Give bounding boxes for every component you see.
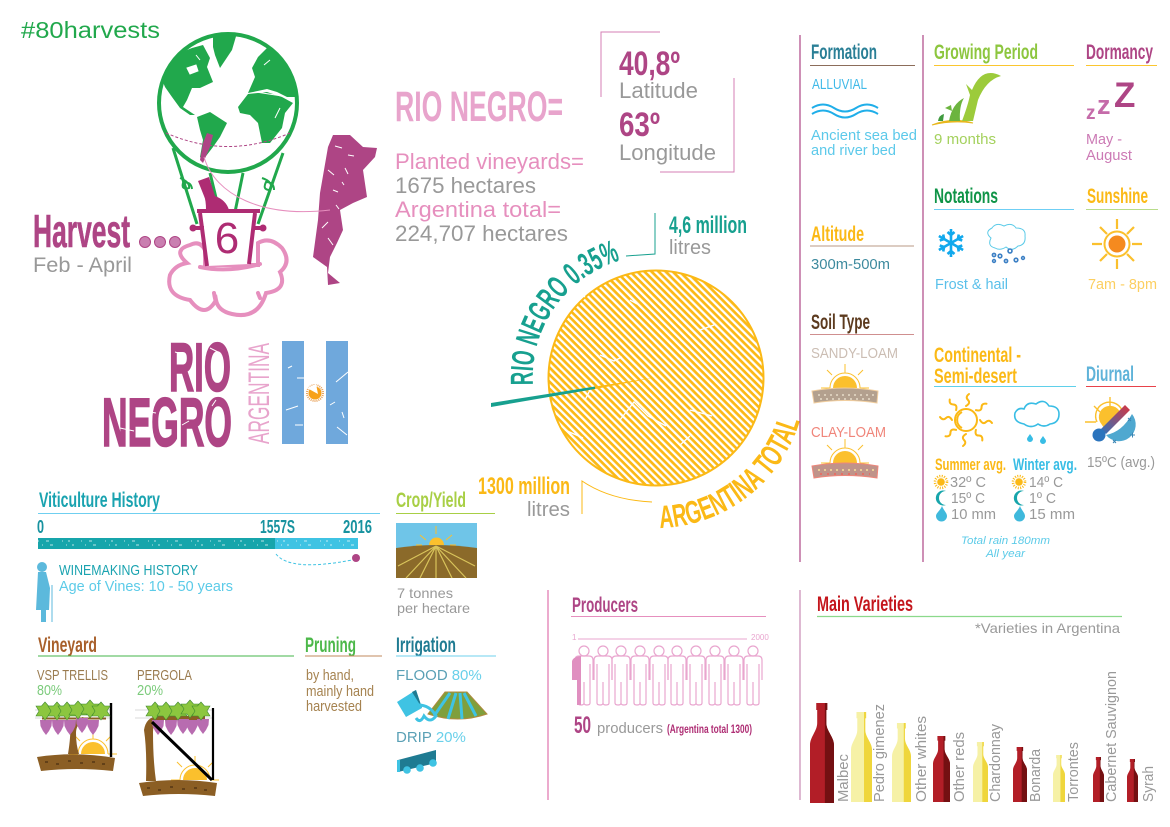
panel: soil type: SANDY-LOAM: [811, 345, 898, 362]
Pedro gimenez: Pedro gimenez: [871, 704, 888, 802]
panel: crop yield: per hectare: [397, 600, 470, 616]
icon: clay loam soil: [812, 439, 878, 478]
panel: irrigation: [396, 634, 496, 774]
panel: notations: [934, 185, 1074, 293]
chart: production circle: [478, 212, 800, 528]
panel: formation: ALLUVIAL: [812, 76, 867, 93]
panel: pruning: mainly hand: [306, 683, 374, 700]
producer count: 50: [574, 712, 591, 739]
summer averages: 32º C: [950, 474, 986, 491]
icon: elderly woman: [36, 562, 52, 622]
icon: sun: [1092, 219, 1142, 269]
icon: summer sun: [940, 394, 992, 446]
Syrah: [1127, 759, 1157, 802]
Torrontes: [1053, 742, 1082, 802]
vineyard area stats: Planted vineyards=: [395, 149, 584, 174]
winter averages: [1013, 455, 1077, 523]
callout: 4,6 million litres: litres: [669, 237, 711, 259]
logo: Rio Negro Argentina: NEGRO: [102, 384, 232, 461]
producer count: [574, 712, 752, 739]
icon: hail cloud: [988, 224, 1025, 263]
panel: climate: [934, 344, 1077, 560]
Torrontes: Torrontes: [1065, 742, 1082, 802]
panel: growing period: Growing Period: [934, 41, 1038, 64]
total rain note: Total rain 180mm: [961, 535, 1050, 547]
panel: producers: [571, 594, 769, 739]
panel: viticulture history: Age of Vines: 10 - 50 years: [59, 578, 233, 595]
pictogram: people: [572, 646, 762, 705]
Bonarda: Bonarda: [1027, 748, 1044, 802]
vineyard area stats: 224,707 hectares: [395, 221, 568, 246]
icon: growing vine: [932, 73, 1001, 125]
icon: rain cloud: [1015, 401, 1059, 444]
panel: viticulture history: Viticulture History: [39, 489, 160, 512]
summer averages: 10 mm: [951, 506, 996, 523]
panel: soil type: CLAY-LOAM: [811, 424, 886, 441]
wine bottle: [198, 177, 229, 210]
globe: [159, 33, 300, 172]
coordinates box: Latitude: [619, 78, 698, 103]
wine bucket with number: 6: [215, 214, 239, 263]
icon: sleep letters: z: [1097, 90, 1110, 120]
wine bucket with number: [190, 211, 266, 266]
icon: pergola: [135, 700, 219, 796]
vineyard area stats: 1675 hectares: [395, 173, 536, 198]
callout: 1300 million litres: [478, 473, 652, 521]
Cabernet Sauvignon: Cabernet Sauvignon: [1103, 671, 1120, 802]
Other whites: [892, 716, 930, 802]
timeline labels: 1557S: [260, 517, 295, 537]
panel: main varieties: *Varieties in Argentina: [975, 620, 1120, 636]
drip label: DRIP 20%: [396, 729, 466, 746]
Argentina total circle: [548, 270, 764, 486]
panel: vineyard: [35, 634, 294, 796]
panel: climate: Continental -: [934, 344, 1021, 367]
icon: sleep letters: [1086, 76, 1135, 124]
logo: Rio Negro Argentina: ARGENTINA: [243, 343, 276, 444]
panel: altitude: Altitude: [811, 223, 864, 246]
panel: formation: [810, 41, 917, 159]
Other reds: Other reds: [951, 732, 968, 802]
scale: 2000: [751, 633, 769, 642]
Pedro gimenez: [851, 704, 888, 802]
panel: vineyard: 80%: [37, 682, 62, 699]
panel: soil type: [810, 311, 914, 478]
harvest dates: Feb - April: [33, 254, 132, 277]
panel: diurnal: Diurnal: [1086, 363, 1134, 386]
cloud: [169, 240, 287, 315]
panel: vineyard: Vineyard: [38, 634, 97, 657]
panel: notations: Frost & hail: [935, 276, 1008, 293]
panel: diurnal: [1085, 363, 1156, 471]
panel: vineyard: 20%: [137, 682, 163, 699]
icon: field with sun: [396, 523, 477, 578]
panel: formation: Ancient sea bed: [811, 127, 917, 144]
Syrah: Syrah: [1140, 766, 1157, 802]
winter averages: 14º C: [1029, 474, 1063, 491]
panel: dormancy: August: [1086, 147, 1133, 164]
winter averages: 15 mm: [1029, 506, 1075, 523]
icon: snowflake: [937, 229, 965, 257]
panel: altitude: [810, 223, 914, 273]
panel: pruning: [305, 634, 382, 715]
panel: vineyard: VSP TRELLIS: [37, 667, 108, 684]
callout: 4,6 million litres: [626, 212, 747, 259]
icon: flood irrigation: [397, 690, 487, 721]
icon: sleep letters: Z: [1114, 76, 1135, 115]
summer averages: [935, 455, 1006, 523]
panel: producers: Producers: [572, 594, 638, 617]
callout: 1300 million litres: litres: [527, 499, 570, 521]
panel: formation: Formation: [811, 41, 877, 64]
coordinates box: 40,8º: [619, 45, 680, 83]
timeline marker: [276, 554, 360, 565]
vineyard area stats: Argentina total=: [395, 197, 561, 222]
winter averages: 1º C: [1029, 490, 1056, 507]
Chardonnay: Chardonnay: [987, 724, 1004, 802]
panel: diurnal: 15ºC (avg.): [1087, 454, 1155, 471]
panel: notations: Notations: [934, 185, 998, 208]
Rio Negro share spoke: [491, 378, 656, 407]
panel: main varieties: [810, 593, 1157, 803]
Other reds: [933, 732, 968, 802]
Chardonnay: [973, 724, 1004, 802]
producer count: (Argentina total 1300): [667, 722, 752, 736]
panel: growing period: 9 months: [934, 131, 996, 148]
logo: Rio Negro Argentina: [102, 329, 276, 461]
panel: crop yield: [396, 489, 495, 616]
winter averages: Winter avg.: [1013, 455, 1077, 474]
panel: climate: Semi-desert: [934, 365, 1017, 388]
producer count: producers: [597, 720, 663, 737]
bottle chart: [810, 671, 1157, 803]
panel: viticulture history: [36, 489, 380, 622]
coordinates box: [601, 32, 734, 172]
icon: sandy loam soil: [812, 364, 878, 403]
Bonarda: [1013, 747, 1044, 802]
panel: pruning: harvested: [306, 698, 362, 715]
panel: dormancy: May -: [1086, 131, 1122, 148]
timeline labels: 0: [37, 517, 44, 537]
panel: sunshine: [1086, 185, 1158, 293]
three dots: [140, 236, 180, 248]
panel: pruning: by hand,: [306, 667, 354, 684]
panel: viticulture history: WINEMAKING HISTORY: [59, 562, 198, 579]
icon: drip irrigation: [397, 750, 437, 774]
panel: crop yield: Crop/Yield: [396, 489, 466, 512]
icon: VSP trellis: [35, 700, 117, 771]
Other whites: Other whites: [913, 716, 930, 802]
timeline labels: 2016: [343, 517, 372, 537]
panel: soil type: Soil Type: [811, 311, 870, 334]
scale: 1: [572, 633, 577, 642]
flag: [282, 341, 348, 444]
balloon strings: [173, 148, 283, 224]
logo: Rio Negro Argentina: RIO: [169, 329, 231, 406]
total rain note: [961, 535, 1050, 560]
hashtag title: #80harvests: [21, 17, 160, 43]
illustration: globe hot air balloon: [159, 33, 300, 315]
callout: 1300 million litres: 1300 million: [478, 473, 570, 500]
panel: dormancy: [1086, 41, 1157, 164]
summer averages: Summer avg.: [935, 455, 1006, 474]
icon: sleep letters: z: [1086, 103, 1096, 124]
coordinates box: 63º: [619, 106, 660, 144]
panel: altitude: 300m-500m: [811, 257, 890, 273]
timeline labels: [37, 517, 372, 537]
panel: sunshine: 7am - 8pm: [1088, 276, 1157, 293]
Malbec: Malbec: [835, 754, 852, 802]
panel: pruning: Pruning: [305, 634, 356, 657]
harvest heading: Harvest: [33, 205, 130, 257]
icon: thermometer sun and moon: [1085, 397, 1136, 443]
panel: crop yield: 7 tonnes: [397, 585, 453, 601]
heading: Rio Negro: RIO NEGRO=: [395, 83, 563, 131]
panel: vineyard: PERGOLA: [137, 667, 192, 684]
coordinates box: Longitude: [619, 140, 716, 165]
panel: growing period: [932, 41, 1074, 148]
map: Argentina: [204, 135, 377, 285]
timeline bar: [38, 538, 358, 549]
callout: 4,6 million litres: 4,6 million: [669, 212, 747, 239]
curved label: Argentina total: ARGENTINA TOTAL: [660, 420, 800, 528]
summer averages: 15º C: [951, 490, 985, 507]
icon: water waves: [812, 104, 878, 118]
panel: irrigation: Irrigation: [396, 634, 456, 657]
total rain note: All year: [985, 548, 1026, 560]
Cabernet Sauvignon: [1093, 671, 1120, 802]
curved label: Rio Negro share: RIO NEGRO 0.35%: [510, 240, 619, 384]
panel: main varieties: Main Varieties: [817, 593, 913, 616]
vineyard area stats: [395, 149, 584, 246]
flood label: FLOOD 80%: [396, 667, 482, 684]
Malbec: [810, 703, 852, 803]
panel: formation: and river bed: [811, 142, 896, 159]
scale: [572, 633, 769, 642]
